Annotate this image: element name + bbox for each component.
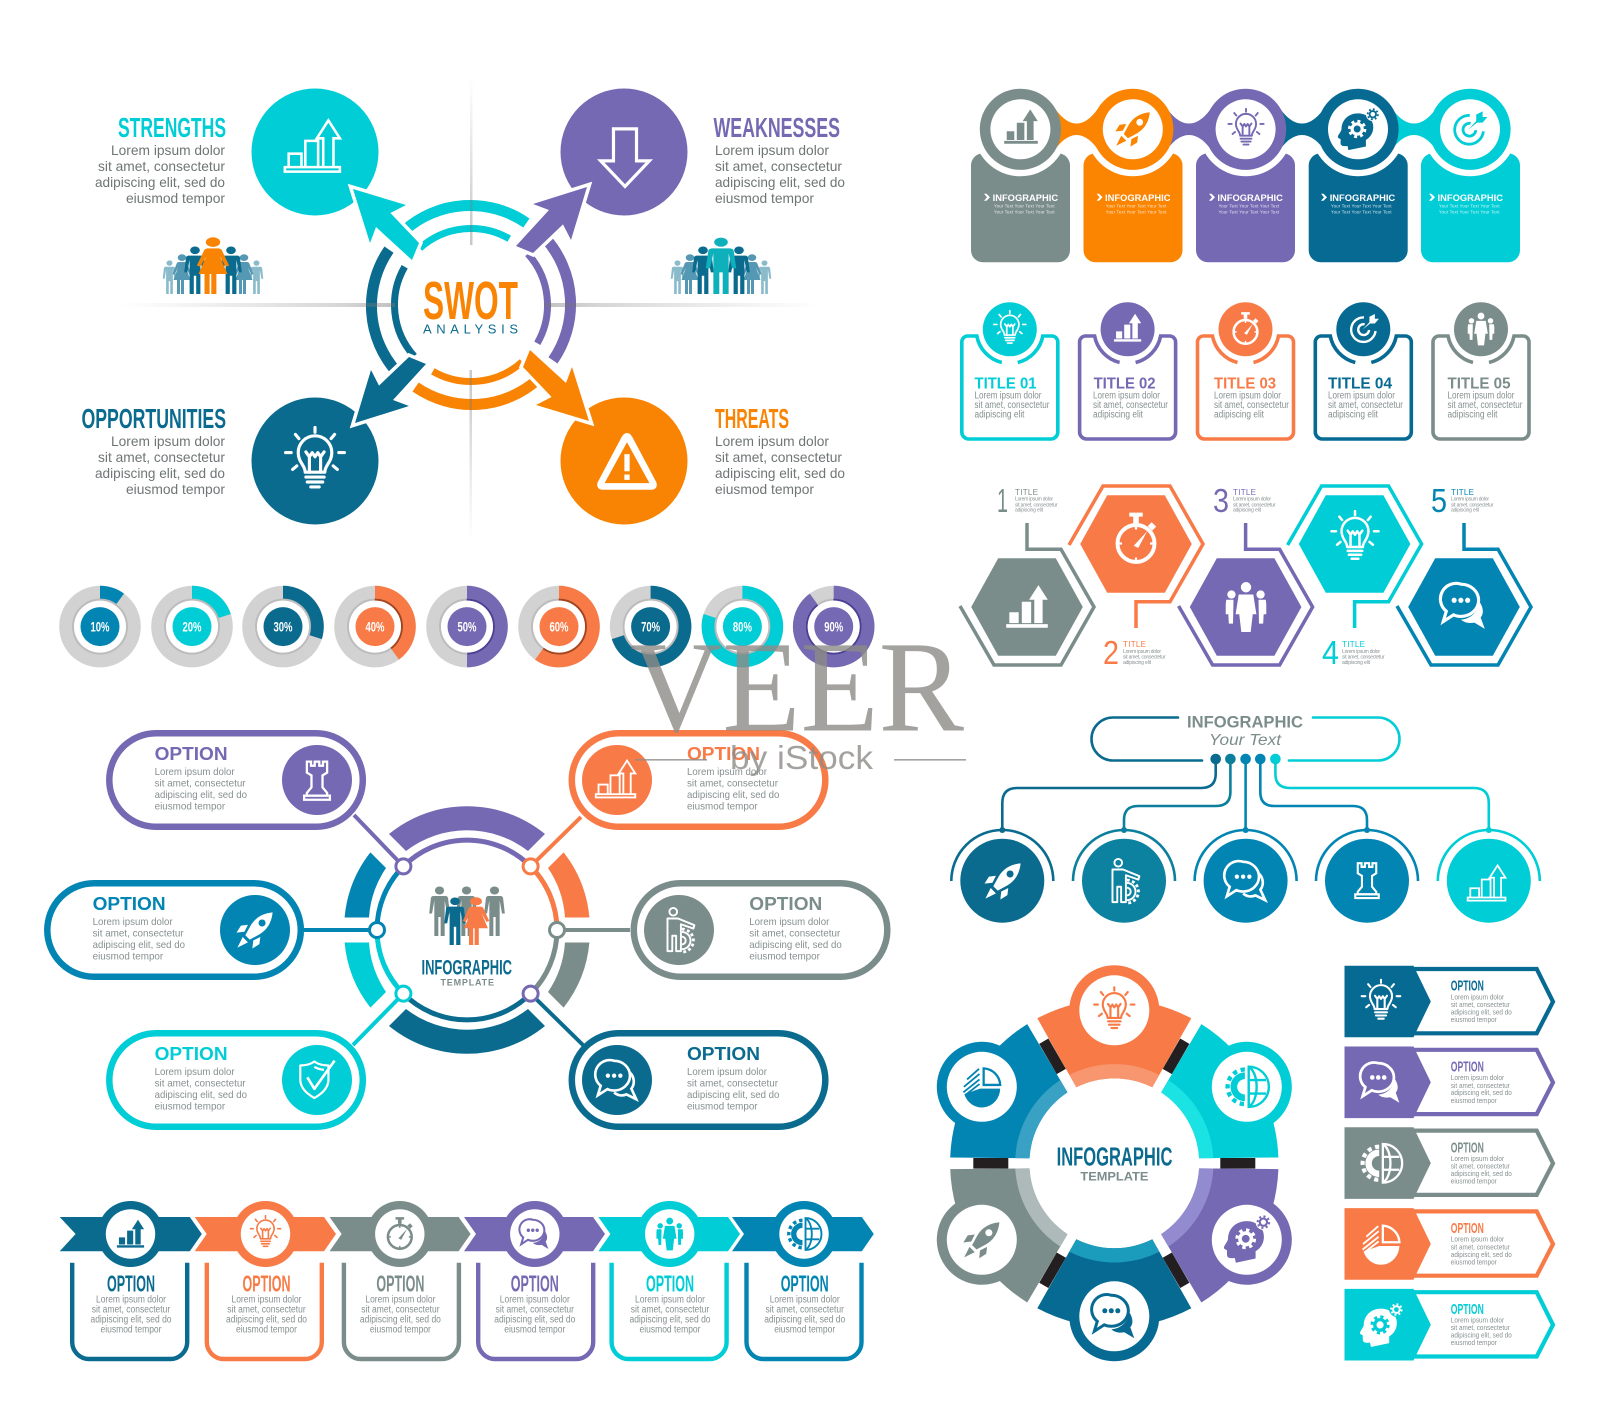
card 04 text: sit amet, consectetur: [1328, 400, 1404, 411]
tile text: Your Text Your Text Your Text: [1439, 210, 1500, 214]
text: strengths: [95, 142, 225, 206]
card 03 text: [1214, 375, 1290, 421]
panel: option hub: [47, 733, 887, 1127]
list item: pie: eiusmod tempor: [1451, 1257, 1497, 1266]
text: threats: [715, 433, 845, 497]
panel: hexagon steps: [960, 482, 1531, 671]
option pill: shield: Lorem ipsum dolor: [155, 1066, 235, 1078]
step label 2: sit amet, consectetur: [1123, 655, 1166, 661]
card 05 text: [1448, 375, 1523, 421]
card 04 text: adipiscing elit: [1328, 410, 1378, 421]
list item: bulb: OPTION: [1451, 978, 1484, 995]
tile text: Your Text Your Text Your Text: [994, 210, 1055, 214]
list item: head: sit amet, consectetur: [1451, 1323, 1510, 1332]
donut 20%: 20%: [182, 619, 202, 635]
option pill: rook: eiusmod tempor: [155, 800, 226, 812]
timeline step 5: OPTION: [646, 1271, 694, 1297]
tile connectors: [1052, 104, 1439, 154]
donut 30%: [242, 586, 324, 667]
step label 3: adipiscing elit: [1233, 508, 1262, 514]
wheel connectors: [973, 1039, 1255, 1288]
step label 1: sit amet, consectetur: [1015, 502, 1058, 508]
step label 1: adipiscing elit: [1015, 508, 1044, 514]
option pill: businessman: adipiscing elit, sed do: [749, 939, 842, 951]
timeline step 1: sit amet, consectetur: [92, 1304, 171, 1315]
list item: bulb: [1344, 966, 1553, 1037]
step label 1: TITLE: [1015, 488, 1038, 497]
card 03 text: sit amet, consectetur: [1214, 400, 1290, 411]
text: threats: Lorem ipsum dolor: [715, 433, 829, 449]
text: opportunities: [95, 433, 225, 497]
tile text: Your Text Your Text Your Text: [1106, 210, 1167, 214]
list item: head: adipiscing elit, sed do: [1451, 1331, 1512, 1340]
tree node: chart: [1438, 827, 1540, 923]
timeline step 2: sit amet, consectetur: [227, 1304, 306, 1315]
wheel segment: bulb: [1037, 965, 1191, 1087]
timeline step 4: sit amet, consectetur: [496, 1304, 575, 1315]
text: opportunities: adipiscing elit, sed do: [95, 465, 225, 481]
card 04 text: TITLE 04: [1328, 375, 1392, 392]
option pill: shield: [109, 1033, 363, 1127]
tile text: INFOGRAPHIC: [993, 193, 1058, 204]
step label 2: 2: [1103, 634, 1119, 671]
option pill: chat: [572, 1033, 825, 1127]
hexagon 5: [1397, 523, 1531, 665]
tree node: rook: [1316, 827, 1418, 923]
card 03 text: adipiscing elit: [1214, 410, 1264, 421]
donut 70%: 70%: [641, 619, 660, 635]
hub title: [422, 956, 512, 988]
timeline step 6: sit amet, consectetur: [766, 1304, 844, 1315]
text: strengths: eiusmod tempor: [126, 190, 225, 206]
timeline step 5: adipiscing elit, sed do: [630, 1314, 711, 1325]
option pill: shield: adipiscing elit, sed do: [155, 1089, 247, 1101]
panel: percentage donuts: [59, 586, 874, 667]
step label 2: adipiscing elit: [1123, 660, 1152, 666]
timeline step 6: adipiscing elit, sed do: [764, 1314, 846, 1325]
wheel title: TEMPLATE: [1080, 1171, 1149, 1183]
timeline step 3: Lorem ipsum dolor: [365, 1294, 436, 1305]
step label 2: [1103, 634, 1166, 671]
tile text: INFOGRAPHIC: [1330, 193, 1395, 204]
list item: chat: sit amet, consectetur: [1451, 1081, 1510, 1090]
heading: weaknesses: WEAKNESSES: [714, 112, 840, 143]
step label 3: sit amet, consectetur: [1233, 502, 1276, 508]
option pill: shield: OPTION: [155, 1044, 228, 1064]
timeline step 2: eiusmod tempor: [236, 1324, 298, 1335]
watermark: by iStock: [730, 739, 874, 776]
list item: chat: OPTION: [1451, 1059, 1484, 1076]
option pill: businessman: sit amet, consectetur: [749, 928, 841, 940]
donut 80%: [702, 586, 783, 667]
list item: bulb: adipiscing elit, sed do: [1451, 1007, 1512, 1016]
tile text: INFOGRAPHIC: [1105, 193, 1171, 204]
hub inner ring: [377, 840, 557, 1020]
option pill: rook: [109, 733, 363, 827]
step label 5: 5: [1431, 482, 1447, 519]
circle: opportunities: [252, 398, 378, 524]
timeline step 3: eiusmod tempor: [370, 1324, 431, 1335]
timeline step 4: OPTION: [511, 1271, 559, 1297]
option pill: chart: adipiscing elit, sed do: [687, 789, 780, 801]
hub nodes: [370, 859, 564, 1001]
timeline step 1: [72, 1201, 187, 1359]
list item: head: OPTION: [1451, 1301, 1484, 1318]
option pill: rook: adipiscing elit, sed do: [155, 789, 247, 801]
icon: people group right: [671, 238, 771, 294]
panel: arrow timeline: [60, 1201, 874, 1359]
option pill: rocket: Lorem ipsum dolor: [93, 916, 173, 928]
donut 40%: 40%: [366, 619, 385, 635]
text: weaknesses: eiusmod tempor: [715, 190, 814, 206]
donut 40%: [334, 586, 416, 667]
heading: opportunities: OPPORTUNITIES: [82, 403, 226, 434]
card 02 text: [1093, 375, 1169, 421]
swot ring: dark blue: [355, 250, 426, 423]
text: opportunities: Lorem ipsum dolor: [111, 433, 225, 449]
timeline step 2: OPTION: [242, 1271, 290, 1297]
donut 80%: 80%: [733, 619, 752, 635]
icon: people group left: [163, 237, 263, 294]
hexagon 4: [1288, 486, 1422, 628]
card 04: [1315, 302, 1411, 439]
list item: head: Lorem ipsum dolor: [1451, 1316, 1505, 1324]
timeline step 6: Lorem ipsum dolor: [770, 1294, 840, 1305]
card 03 text: Lorem ipsum dolor: [1214, 390, 1282, 401]
option pill: rocket: adipiscing elit, sed do: [93, 939, 185, 951]
option pill: chart: [572, 733, 825, 827]
text: strengths: sit amet, consectetur: [98, 158, 225, 174]
card 02: [1080, 302, 1176, 439]
wheel title: INFOGRAPHIC: [1057, 1143, 1172, 1171]
list item: pie: [1344, 1208, 1553, 1280]
panel: SWOT analysis: [82, 75, 845, 540]
text: strengths: adipiscing elit, sed do: [95, 174, 225, 190]
swot title: ANALYSIS: [423, 322, 518, 336]
timeline step 4: [478, 1201, 593, 1359]
timeline step 4: adipiscing elit, sed do: [494, 1314, 576, 1325]
tile text: INFOGRAPHIC: [1438, 193, 1503, 204]
list item: chat: eiusmod tempor: [1451, 1096, 1497, 1105]
list item: globe: adipiscing elit, sed do: [1451, 1169, 1512, 1178]
option pill: businessman: OPTION: [749, 894, 822, 914]
step label 2: Lorem ipsum dolor: [1123, 649, 1161, 655]
heading: threats: THREATS: [715, 403, 789, 434]
swot ring: teal: [353, 189, 526, 260]
list item: globe: eiusmod tempor: [1451, 1177, 1497, 1186]
donut 70%: [610, 586, 691, 667]
timeline step 6: OPTION: [781, 1271, 829, 1297]
card 05 text: TITLE 05: [1448, 375, 1511, 392]
panel: title cards: [962, 302, 1529, 439]
option pill: chat: Lorem ipsum dolor: [687, 1066, 767, 1078]
list item: chat: [1344, 1046, 1553, 1118]
list item: head: [1344, 1289, 1553, 1360]
card 04 text: Lorem ipsum dolor: [1328, 390, 1396, 401]
hub outer segments: [345, 806, 589, 1054]
tree header text: INFOGRAPHIC: [1187, 713, 1303, 731]
tile text: Your Text Your Text Your Text: [1106, 204, 1167, 208]
card 05: [1433, 302, 1529, 439]
card 04 text: [1328, 375, 1404, 421]
swot title: [423, 271, 518, 336]
donut 10%: [59, 586, 141, 667]
tile text: Your Text Your Text Your Text: [1219, 204, 1280, 208]
timeline banner: [60, 1217, 874, 1251]
hexagon 2: [1069, 486, 1203, 628]
step label 4: TITLE: [1342, 640, 1365, 649]
swot title: SWOT: [423, 271, 518, 331]
option pill: rook: sit amet, consectetur: [155, 778, 246, 790]
card 02 text: adipiscing elit: [1093, 410, 1143, 421]
list item: bulb: eiusmod tempor: [1451, 1015, 1497, 1024]
text: threats: eiusmod tempor: [715, 481, 814, 497]
option pill: chart: sit amet, consectetur: [687, 778, 778, 790]
list item: globe: OPTION: [1451, 1139, 1484, 1156]
option pill: chart: OPTION: [687, 744, 760, 764]
hub connectors: [304, 815, 630, 1046]
text: weaknesses: Lorem ipsum dolor: [715, 142, 829, 158]
hub title: TEMPLATE: [440, 978, 494, 988]
list item: chat: Lorem ipsum dolor: [1451, 1073, 1505, 1082]
card 03 text: TITLE 03: [1214, 375, 1276, 392]
donut 20%: [151, 586, 233, 667]
tile text: Your Text Your Text Your Text: [1331, 210, 1392, 214]
timeline step 5: [612, 1201, 727, 1359]
timeline step 1: Lorem ipsum dolor: [96, 1294, 167, 1305]
option pill: rocket: [47, 883, 301, 977]
option pill: chat: adipiscing elit, sed do: [687, 1089, 780, 1101]
swot ring: orange: [416, 350, 589, 421]
option pill: chat: OPTION: [687, 1044, 760, 1064]
step label 3: TITLE: [1233, 488, 1256, 497]
list item: globe: Lorem ipsum dolor: [1451, 1154, 1505, 1163]
swot ring: purple: [516, 187, 587, 360]
circle: weaknesses: [560, 88, 688, 216]
step label 5: adipiscing elit: [1451, 508, 1480, 514]
step label 3: [1213, 482, 1276, 519]
text: strengths: Lorem ipsum dolor: [111, 142, 225, 158]
panel: five infographic tiles: [971, 82, 1520, 262]
option pill: rocket: OPTION: [93, 894, 166, 914]
text: opportunities: sit amet, consectetur: [98, 449, 225, 465]
list item: globe: sit amet, consectetur: [1451, 1162, 1510, 1171]
card 02 text: sit amet, consectetur: [1093, 400, 1169, 411]
timeline step 1: adipiscing elit, sed do: [90, 1314, 172, 1325]
panel: six segment wheel: [904, 965, 1324, 1361]
timeline step 4: Lorem ipsum dolor: [500, 1294, 570, 1305]
text: opportunities: eiusmod tempor: [126, 481, 225, 497]
option pill: businessman: eiusmod tempor: [749, 950, 820, 962]
card 03: [1198, 302, 1294, 439]
watermark: VEER: [630, 616, 964, 760]
list item: bulb: sit amet, consectetur: [1451, 1000, 1510, 1009]
step label 5: TITLE: [1451, 488, 1474, 497]
tile icon: head: [1317, 89, 1399, 170]
option pill: rook: Lorem ipsum dolor: [155, 766, 235, 778]
list item: head: eiusmod tempor: [1451, 1338, 1497, 1347]
card 01 text: adipiscing elit: [974, 410, 1025, 421]
timeline step 3: OPTION: [376, 1271, 424, 1297]
timeline step 2: Lorem ipsum dolor: [232, 1294, 302, 1305]
tile text: Your Text Your Text Your Text: [1331, 204, 1392, 208]
tile text: Your Text Your Text Your Text: [1219, 210, 1280, 214]
timeline step 1: OPTION: [107, 1271, 155, 1297]
hub title: INFOGRAPHIC: [422, 956, 512, 980]
timeline step 6: [746, 1201, 862, 1359]
card 01 text: [974, 375, 1050, 421]
wheel segment: pie: [904, 998, 1087, 1192]
text: weaknesses: [715, 142, 845, 206]
step label 4: Lorem ipsum dolor: [1342, 649, 1380, 655]
tree header text: Your Text: [1209, 732, 1282, 749]
donut 50%: [426, 586, 508, 667]
timeline step 4: eiusmod tempor: [504, 1324, 566, 1335]
wheel title: [1057, 1143, 1172, 1183]
tree node: rocket: [951, 827, 1053, 923]
wheel segment: chat: [1037, 1239, 1191, 1361]
tree node: businessman: [1073, 827, 1175, 923]
wheel segment: rocket: [904, 1135, 1087, 1329]
step label 3: Lorem ipsum dolor: [1233, 497, 1271, 503]
timeline step 3: sit amet, consectetur: [361, 1304, 440, 1315]
timeline step 5: sit amet, consectetur: [631, 1304, 710, 1315]
card 01 text: TITLE 01: [974, 375, 1037, 392]
step label 1: Lorem ipsum dolor: [1015, 497, 1053, 503]
tree connectors: [1002, 759, 1489, 830]
step label 5: Lorem ipsum dolor: [1451, 497, 1489, 503]
tile text: INFOGRAPHIC: [1217, 193, 1283, 204]
step label 4: 4: [1322, 634, 1339, 671]
list item: pie: OPTION: [1451, 1220, 1484, 1237]
step label 2: TITLE: [1123, 640, 1146, 649]
card texts: [974, 375, 1523, 421]
option pill: businessman: Lorem ipsum dolor: [749, 916, 830, 928]
tile icon: target: [1429, 89, 1511, 170]
text: threats: sit amet, consectetur: [715, 449, 842, 465]
card 05 text: adipiscing elit: [1448, 410, 1498, 421]
step label 1: [997, 482, 1058, 519]
card 02 text: TITLE 02: [1094, 375, 1156, 392]
tile backgrounds: [971, 153, 1520, 262]
card 01: [962, 302, 1058, 439]
hexagon 3: [1179, 523, 1313, 665]
wheel segment: globe: [1142, 998, 1324, 1192]
tile icon: chart: [980, 89, 1061, 170]
list item: pie: sit amet, consectetur: [1451, 1242, 1510, 1251]
hub people icon: [429, 886, 505, 945]
step label 1: 1: [997, 482, 1008, 519]
list item: pie: Lorem ipsum dolor: [1451, 1235, 1505, 1244]
list item: bulb: Lorem ipsum dolor: [1451, 992, 1505, 1001]
option pill: shield: sit amet, consectetur: [155, 1078, 246, 1090]
panel: option arrow list: [1344, 966, 1553, 1360]
option pill: rocket: sit amet, consectetur: [93, 928, 184, 940]
card 01 text: sit amet, consectetur: [974, 400, 1050, 411]
donut 60%: 60%: [550, 619, 569, 635]
step label 4: sit amet, consectetur: [1342, 655, 1385, 661]
tile icon: rocket: [1092, 89, 1173, 170]
option pill: chat: sit amet, consectetur: [687, 1078, 778, 1090]
timeline step 1: eiusmod tempor: [100, 1324, 162, 1335]
list item: chat: adipiscing elit, sed do: [1451, 1088, 1512, 1097]
timeline step 5: Lorem ipsum dolor: [635, 1294, 706, 1305]
option pill: chat: eiusmod tempor: [687, 1100, 758, 1112]
panel: organisation tree: [951, 713, 1540, 923]
card 02 text: Lorem ipsum dolor: [1093, 390, 1161, 401]
circle: strengths: [252, 88, 378, 216]
tile text: Your Text Your Text Your Text: [994, 204, 1055, 208]
card 05 text: Lorem ipsum dolor: [1448, 390, 1515, 401]
tile text: Your Text Your Text Your Text: [1439, 204, 1500, 208]
donut 90%: 90%: [824, 619, 844, 635]
option pill: rook: OPTION: [155, 744, 228, 764]
donut 10%: 10%: [90, 619, 110, 635]
donut 90%: [793, 586, 874, 667]
text: threats: adipiscing elit, sed do: [715, 465, 845, 481]
option pill: businessman: [634, 883, 887, 977]
option pill: shield: eiusmod tempor: [155, 1100, 226, 1112]
step label 4: [1322, 634, 1385, 671]
tree dots: [1210, 754, 1281, 764]
option pill: chart: Lorem ipsum dolor: [687, 766, 767, 778]
step label 5: sit amet, consectetur: [1451, 502, 1494, 508]
tile text: [984, 193, 1503, 214]
timeline step 3: [344, 1201, 459, 1359]
circle: threats: [560, 398, 688, 524]
wheel segment: head: [1142, 1135, 1324, 1329]
text: weaknesses: adipiscing elit, sed do: [715, 174, 845, 190]
timeline step 3: adipiscing elit, sed do: [360, 1314, 441, 1325]
tile icon: bulb: [1205, 89, 1286, 170]
list item: pie: adipiscing elit, sed do: [1451, 1250, 1512, 1259]
option pill: rocket: eiusmod tempor: [93, 950, 164, 962]
donut 30%: 30%: [274, 619, 293, 635]
list item: globe: [1344, 1127, 1553, 1199]
hexagon 1: [960, 523, 1094, 665]
tree header frame: [1092, 718, 1400, 760]
timeline step 5: eiusmod tempor: [640, 1324, 701, 1335]
donut 50%: 50%: [458, 619, 477, 635]
tree header text: [1187, 713, 1303, 749]
option pill: chart: eiusmod tempor: [687, 800, 758, 812]
donut 60%: [518, 586, 600, 667]
card 05 text: sit amet, consectetur: [1448, 400, 1523, 411]
card 01 text: Lorem ipsum dolor: [974, 390, 1042, 401]
step label 3: 3: [1213, 482, 1229, 519]
timeline step 6: eiusmod tempor: [774, 1324, 836, 1335]
heading: strengths: STRENGTHS: [118, 112, 226, 143]
tree node: chat: [1195, 827, 1297, 923]
timeline step 2: adipiscing elit, sed do: [226, 1314, 307, 1325]
timeline step 2: [207, 1201, 322, 1359]
step label 4: adipiscing elit: [1342, 660, 1371, 666]
text: weaknesses: sit amet, consectetur: [715, 158, 842, 174]
step label 5: [1431, 482, 1494, 519]
